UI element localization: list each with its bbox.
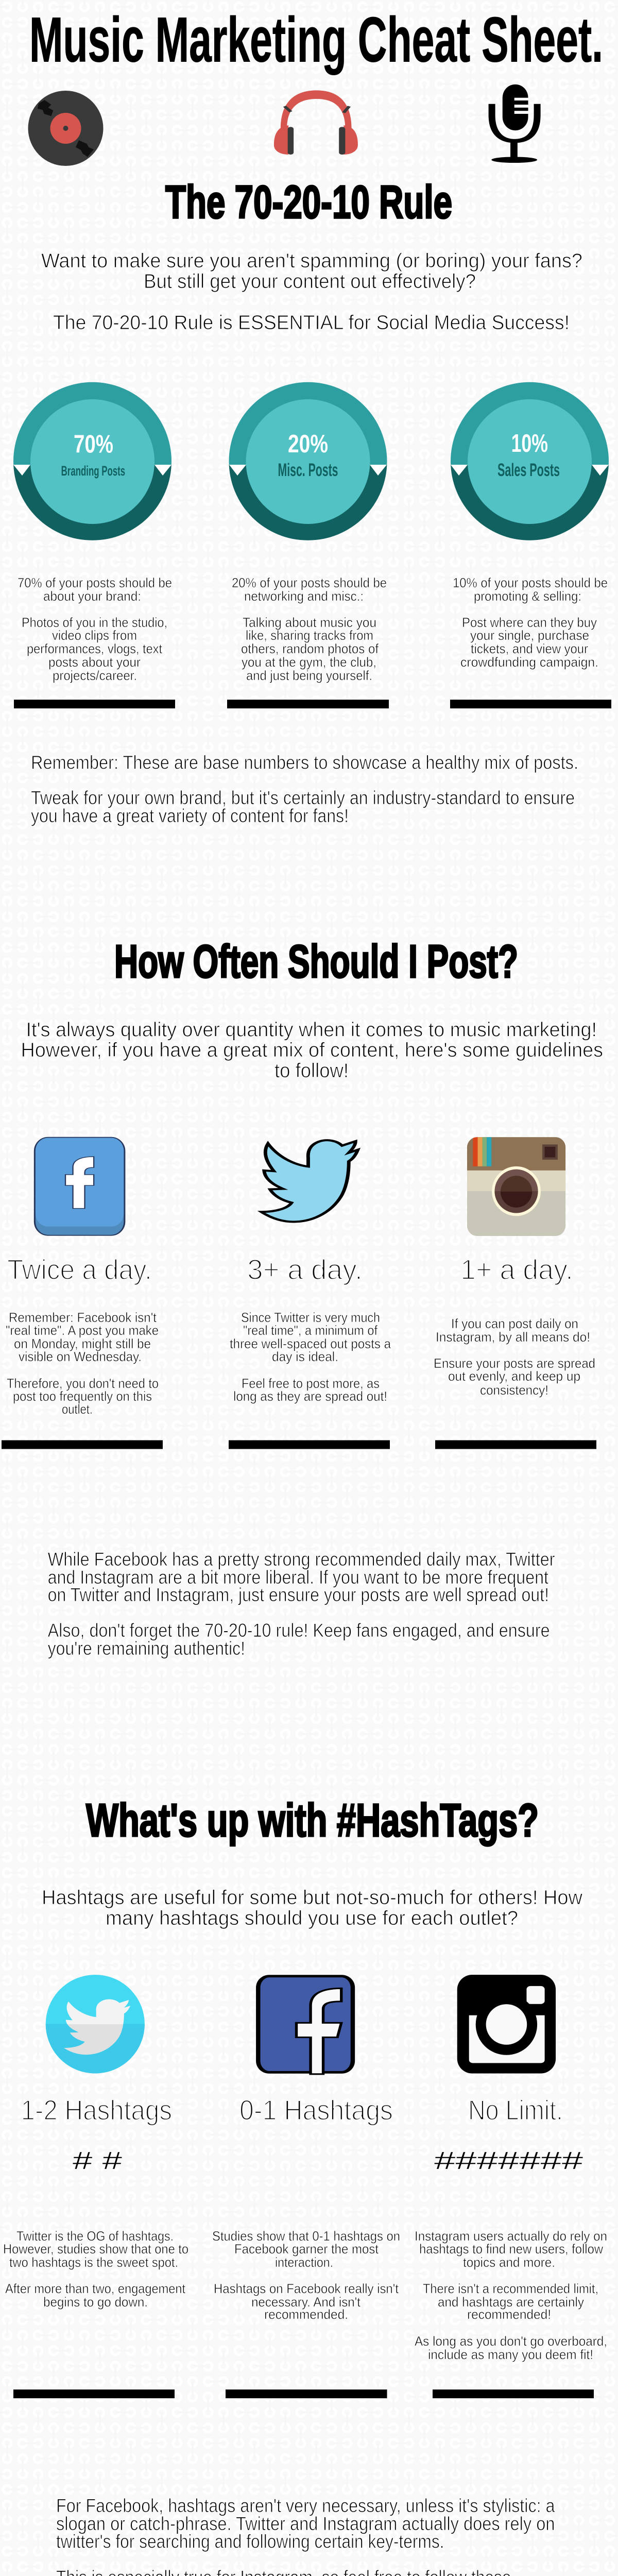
- text: instagram hashtags: include as many you deem fit!: [428, 2347, 593, 2362]
- label: one plus a day: 1+ a day.: [460, 1253, 573, 1285]
- text: instagram frequency: out evenly, and keep up: [448, 1368, 580, 1384]
- text: instagram frequency: If you can post daily on: [451, 1316, 578, 1331]
- text: hashtag summary: [56, 2495, 555, 2576]
- text: facebook hashtags: [212, 2228, 400, 2322]
- text: sales column: your single, purchase: [470, 628, 589, 643]
- text: twitter hashtags: However, studies show that one to: [3, 2241, 188, 2257]
- panel: 20 percent misc posts: 20%: [288, 430, 328, 458]
- text: facebook frequency: Therefore, you don't need to: [7, 1376, 159, 1391]
- text: posting intro: [21, 1019, 603, 1082]
- hash marks: twitter: # #: [72, 2147, 123, 2175]
- heading: 70-20-10 rule: The 70-20-10 Rule: [165, 177, 452, 228]
- text: facebook hashtags: recommended.: [264, 2307, 348, 2322]
- text: hashtag intro: Hashtags are useful for some but not-so-much for others! How: [42, 1887, 583, 1909]
- label: no limit: No Limit.: [468, 2094, 563, 2126]
- text: instagram frequency: Ensure your posts are spread: [434, 1355, 595, 1371]
- hash marks: instagram: #######: [434, 2147, 583, 2175]
- text: branding column: projects/career.: [53, 668, 137, 683]
- text: branding column: video clips from: [52, 628, 137, 643]
- text: facebook frequency: visible on Wednesday.: [19, 1349, 142, 1364]
- text: branding column: [18, 575, 172, 683]
- icon: vinyl record: [28, 91, 103, 166]
- text: instagram frequency: [434, 1316, 595, 1398]
- text: sales column: [453, 575, 608, 670]
- text: remember note: [31, 752, 578, 826]
- text: facebook frequency: on Monday, might still be: [14, 1336, 151, 1351]
- text: misc column: Talking about music you: [243, 615, 376, 630]
- text: instagram hashtags: topics and more.: [463, 2255, 555, 2270]
- text: sales column: promoting & selling:: [474, 588, 581, 604]
- icon: facebook square: [258, 1976, 353, 2074]
- text: instagram frequency: Instagram, by all means do!: [436, 1329, 590, 1345]
- text: facebook hashtags: interaction.: [275, 2255, 333, 2270]
- text: remember note: you have a great variety of content for fans!: [31, 805, 349, 826]
- text: instagram hashtags: There isn't a recommended limit,: [423, 2281, 598, 2296]
- panel: 10 percent sales posts: Sales Posts: [497, 460, 560, 480]
- panel: 10 percent sales posts: 10%: [511, 430, 548, 457]
- icon: microphone: [491, 84, 537, 163]
- text: posting summary: [48, 1549, 555, 1659]
- panel: 70 percent branding posts: Branding Posts: [61, 463, 125, 479]
- text: branding column: 70% of your posts should be: [18, 575, 172, 590]
- text: twitter frequency: long as they are spread out!: [233, 1388, 387, 1404]
- icon: twitter circle: [46, 1975, 145, 2074]
- text: misc column: others, random photos of: [241, 641, 379, 656]
- text: instagram hashtags: recommended!: [467, 2307, 551, 2322]
- text: misc column: you at the gym, the club,: [242, 654, 376, 670]
- text: misc column: like, sharing tracks from: [246, 628, 373, 643]
- text: hashtag summary: slogan or catch-phrase. Twitter and Instagram actually does rely on: [56, 2513, 555, 2534]
- text: hashtag intro: [42, 1887, 583, 1929]
- text: misc column: and just being yourself.: [246, 668, 372, 683]
- label: twice a day: Twice a day.: [7, 1253, 152, 1285]
- icon: instagram camera: [467, 1137, 565, 1236]
- text: instagram frequency: consistency!: [480, 1382, 548, 1398]
- text: intro: But still get your content out effectively?: [144, 270, 476, 293]
- text: twitter frequency: Since Twitter is very much: [241, 1310, 380, 1325]
- text: facebook frequency: post too frequently on this: [13, 1388, 152, 1404]
- panel: 70 percent branding posts: [13, 382, 171, 540]
- text: posting summary: Also, don't forget the 70-20-10 rule! Keep fans engaged, and ensure: [48, 1620, 550, 1641]
- text: hashtag intro: many hashtags should you use for each outlet?: [106, 1907, 518, 1929]
- icon: twitter bird: [261, 1140, 358, 1222]
- icon: headphones: [274, 90, 358, 155]
- text: facebook frequency: [6, 1310, 159, 1417]
- text: facebook hashtags: Studies show that 0-1 hashtags on: [212, 2228, 400, 2244]
- text: branding column: Photos of you in the studio,: [22, 615, 167, 630]
- text: twitter hashtags: Twitter is the OG of hashtags.: [16, 2228, 174, 2244]
- text: facebook frequency: Remember: Facebook isn't: [9, 1310, 157, 1325]
- text: instagram hashtags: and hashtags are certainly: [438, 2294, 584, 2310]
- panel: 20 percent misc posts: [229, 382, 387, 540]
- text: posting summary: and Instagram are a bit more liberal. If you want to be more frequent: [48, 1567, 549, 1588]
- text: instagram hashtags: Instagram users actually do rely on: [415, 2228, 607, 2244]
- text: intro: [41, 250, 582, 334]
- text: intro: Want to make sure you aren't spamming (or boring) your fans?: [41, 250, 582, 272]
- label: 1-2 hashtags: 1-2 Hashtags: [21, 2094, 172, 2126]
- text: branding column: posts about your: [48, 654, 141, 670]
- text: facebook hashtags: Facebook garner the most: [234, 2241, 379, 2257]
- text: facebook frequency: "real time". A post you make: [6, 1323, 159, 1338]
- text: twitter hashtags: two hashtags is the sweet spot.: [9, 2255, 178, 2270]
- text: posting intro: to follow!: [274, 1060, 349, 1082]
- panel: 20 percent misc posts: Misc. Posts: [278, 460, 338, 480]
- text: posting intro: However, if you have a great mix of content, here's some guidelines: [21, 1039, 603, 1061]
- text: instagram hashtags: [415, 2228, 607, 2362]
- text: facebook hashtags: Hashtags on Facebook really isn't: [214, 2281, 399, 2296]
- text: facebook frequency: outlet.: [62, 1401, 93, 1417]
- text: twitter frequency: "real time", a minimum of: [243, 1323, 378, 1338]
- text: facebook hashtags: necessary. And isn't: [251, 2294, 361, 2310]
- panel: 70 percent branding posts: 70%: [74, 431, 113, 459]
- text: posting summary: you're remaining authentic!: [48, 1638, 245, 1659]
- text: twitter frequency: three well-spaced out posts a: [230, 1336, 391, 1351]
- text: hashtag summary: For Facebook, hashtags aren't very necessary, unless it's stylistic: a: [56, 2495, 555, 2516]
- panel: 10 percent sales posts: [451, 382, 609, 540]
- text: twitter frequency: Feel free to post more, as: [242, 1376, 380, 1391]
- text: instagram hashtags: As long as you don't go overboard,: [415, 2333, 607, 2349]
- text: misc column: [232, 575, 387, 683]
- text: misc column: 20% of your posts should be: [232, 575, 387, 590]
- text: posting summary: on Twitter and Instagram, just ensure your posts are well spread out!: [48, 1584, 549, 1605]
- text: hashtag summary: twitter's for searching and following certain key-terms.: [56, 2531, 444, 2552]
- text: twitter hashtags: After more than two, engagement: [5, 2281, 186, 2296]
- text: sales column: crowdfunding campaign.: [460, 654, 598, 670]
- text: branding column: performances, vlogs, text: [27, 641, 163, 656]
- label: three plus a day: 3+ a day.: [247, 1253, 363, 1285]
- icon: instagram square: [457, 1975, 556, 2074]
- text: branding column: about your brand:: [43, 588, 141, 604]
- icon: facebook key: [35, 1138, 125, 1235]
- text: posting intro: It's always quality over quantity when it comes to music marketing!: [26, 1019, 597, 1041]
- text: posting summary: While Facebook has a pretty strong recommended daily max, Twitter: [48, 1549, 555, 1570]
- text: misc column: networking and misc.:: [244, 588, 364, 604]
- text: twitter frequency: [230, 1310, 391, 1404]
- text: sales column: 10% of your posts should be: [453, 575, 608, 590]
- label: 0-1 hashtags: 0-1 Hashtags: [239, 2094, 393, 2126]
- text: twitter frequency: day is ideal.: [272, 1349, 338, 1364]
- text: instagram hashtags: hashtags to find new users, follow: [419, 2241, 603, 2257]
- text: sales column: tickets, and view your: [471, 641, 588, 656]
- text: sales column: Post where can they buy: [462, 615, 597, 630]
- text: twitter hashtags: begins to go down.: [43, 2294, 148, 2310]
- text: twitter hashtags: [3, 2228, 188, 2310]
- text: intro: The 70-20-10 Rule is ESSENTIAL for Social Media Success!: [53, 312, 570, 334]
